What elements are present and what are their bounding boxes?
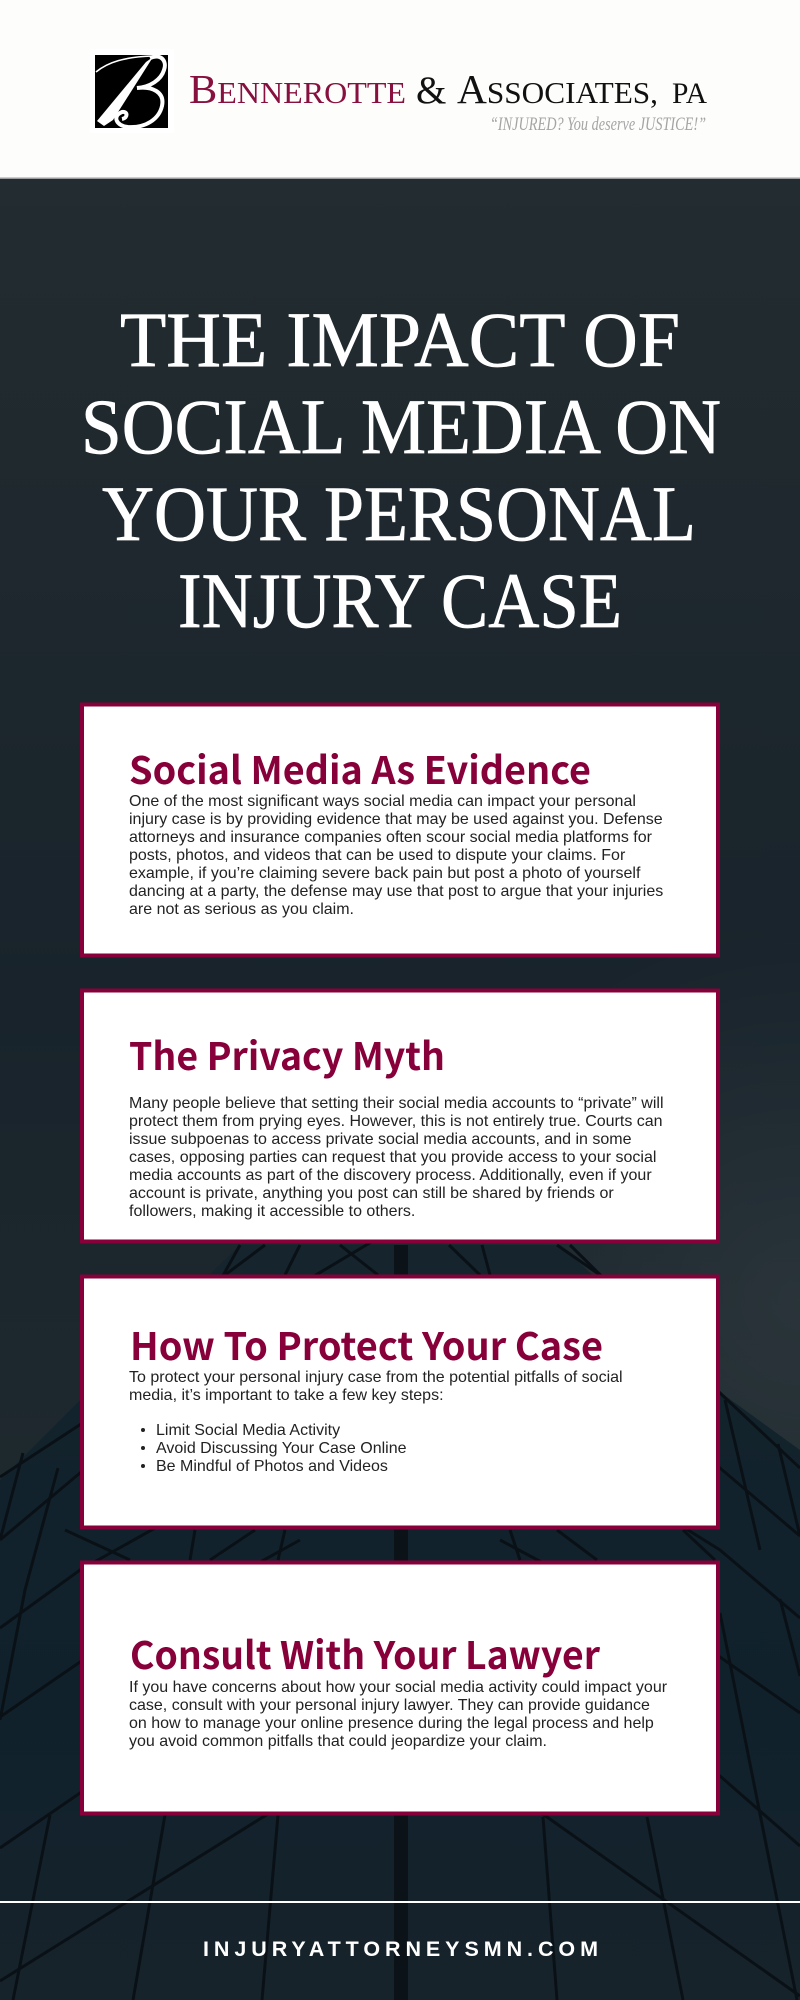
text block: are not as serious as you claim.	[129, 901, 354, 918]
text block: protect them from prying eyes. However, this is not entirely true. Courts can	[129, 1113, 663, 1130]
text block: If you have concerns about how your social media activity could impact your	[129, 1679, 668, 1696]
logo wordmark: BENNEROTTE	[189, 66, 406, 112]
tagline: “INJURED? You deserve JUSTICE!”	[490, 114, 706, 135]
text block: media, it’s important to take a few key steps:	[129, 1387, 444, 1404]
text block: posts, photos, and videos that can be used to dispute your claims. For	[129, 847, 626, 864]
heading: The Privacy Myth	[129, 1026, 445, 1081]
text block: followers, making it accessible to others.	[129, 1203, 415, 1220]
text block: on how to manage your online presence during the legal process and help	[129, 1715, 654, 1732]
panel: the privacy myth	[82, 990, 718, 1242]
bullet list: Be Mindful of Photos and Videos	[156, 1458, 388, 1475]
text block: you avoid common pitfalls that could jeopardize your claim.	[129, 1733, 547, 1750]
title: SOCIAL MEDIA ON	[81, 383, 721, 470]
ampersand: &	[416, 69, 446, 112]
text block: issue subpoenas to access private social media accounts, and in some	[129, 1131, 632, 1148]
header band	[0, 0, 800, 179]
title: THE IMPACT OF	[120, 296, 680, 383]
heading: Consult With Your Lawyer	[130, 1625, 600, 1680]
heading: How To Protect Your Case	[130, 1316, 603, 1371]
text block: To protect your personal injury case from the potential pitfalls of social	[129, 1369, 623, 1386]
text block: injury case is by providing evidence that may be used against you. Defense	[129, 811, 663, 828]
title: YOUR PERSONAL	[102, 470, 696, 557]
heading: Social Media As Evidence	[129, 740, 591, 795]
panel: how to protect your case	[82, 1276, 718, 1528]
logo wordmark part 2: ASSOCIATES,	[457, 66, 658, 112]
text block: Many people believe that setting their social media accounts to “private” will	[129, 1095, 664, 1112]
text block: example, if you’re claiming severe back pain but post a photo of yourself	[129, 865, 641, 882]
bullet list: Limit Social Media Activity	[156, 1422, 340, 1439]
text block: case, consult with your personal injury lawyer. They can provide guidance	[129, 1697, 650, 1714]
text block: dancing at a party, the defense may use that post to argue that your injuries	[129, 883, 663, 900]
title: INJURY CASE	[178, 557, 622, 644]
text block: One of the most significant ways social media can impact your personal	[129, 793, 636, 810]
bullet list: Avoid Discussing Your Case Online	[156, 1440, 407, 1457]
text block: account is private, anything you post can still be shared by friends or	[129, 1185, 614, 1202]
bullet list	[141, 1422, 407, 1475]
logo wordmark suffix: PA	[672, 77, 707, 110]
text block: attorneys and insurance companies often scour social media platforms for	[129, 829, 653, 846]
title	[81, 296, 721, 644]
footer url: INJURYATTORNEYSMN.COM	[203, 1937, 598, 1961]
logo mark: monogram in black square	[90, 49, 174, 133]
panel: social media as evidence	[82, 704, 718, 956]
text block: media accounts as part of the discovery process. Additionally, even if your	[129, 1167, 652, 1184]
text block: cases, opposing parties can request that you provide access to your social	[129, 1149, 656, 1166]
panel: consult with your lawyer	[82, 1562, 718, 1814]
